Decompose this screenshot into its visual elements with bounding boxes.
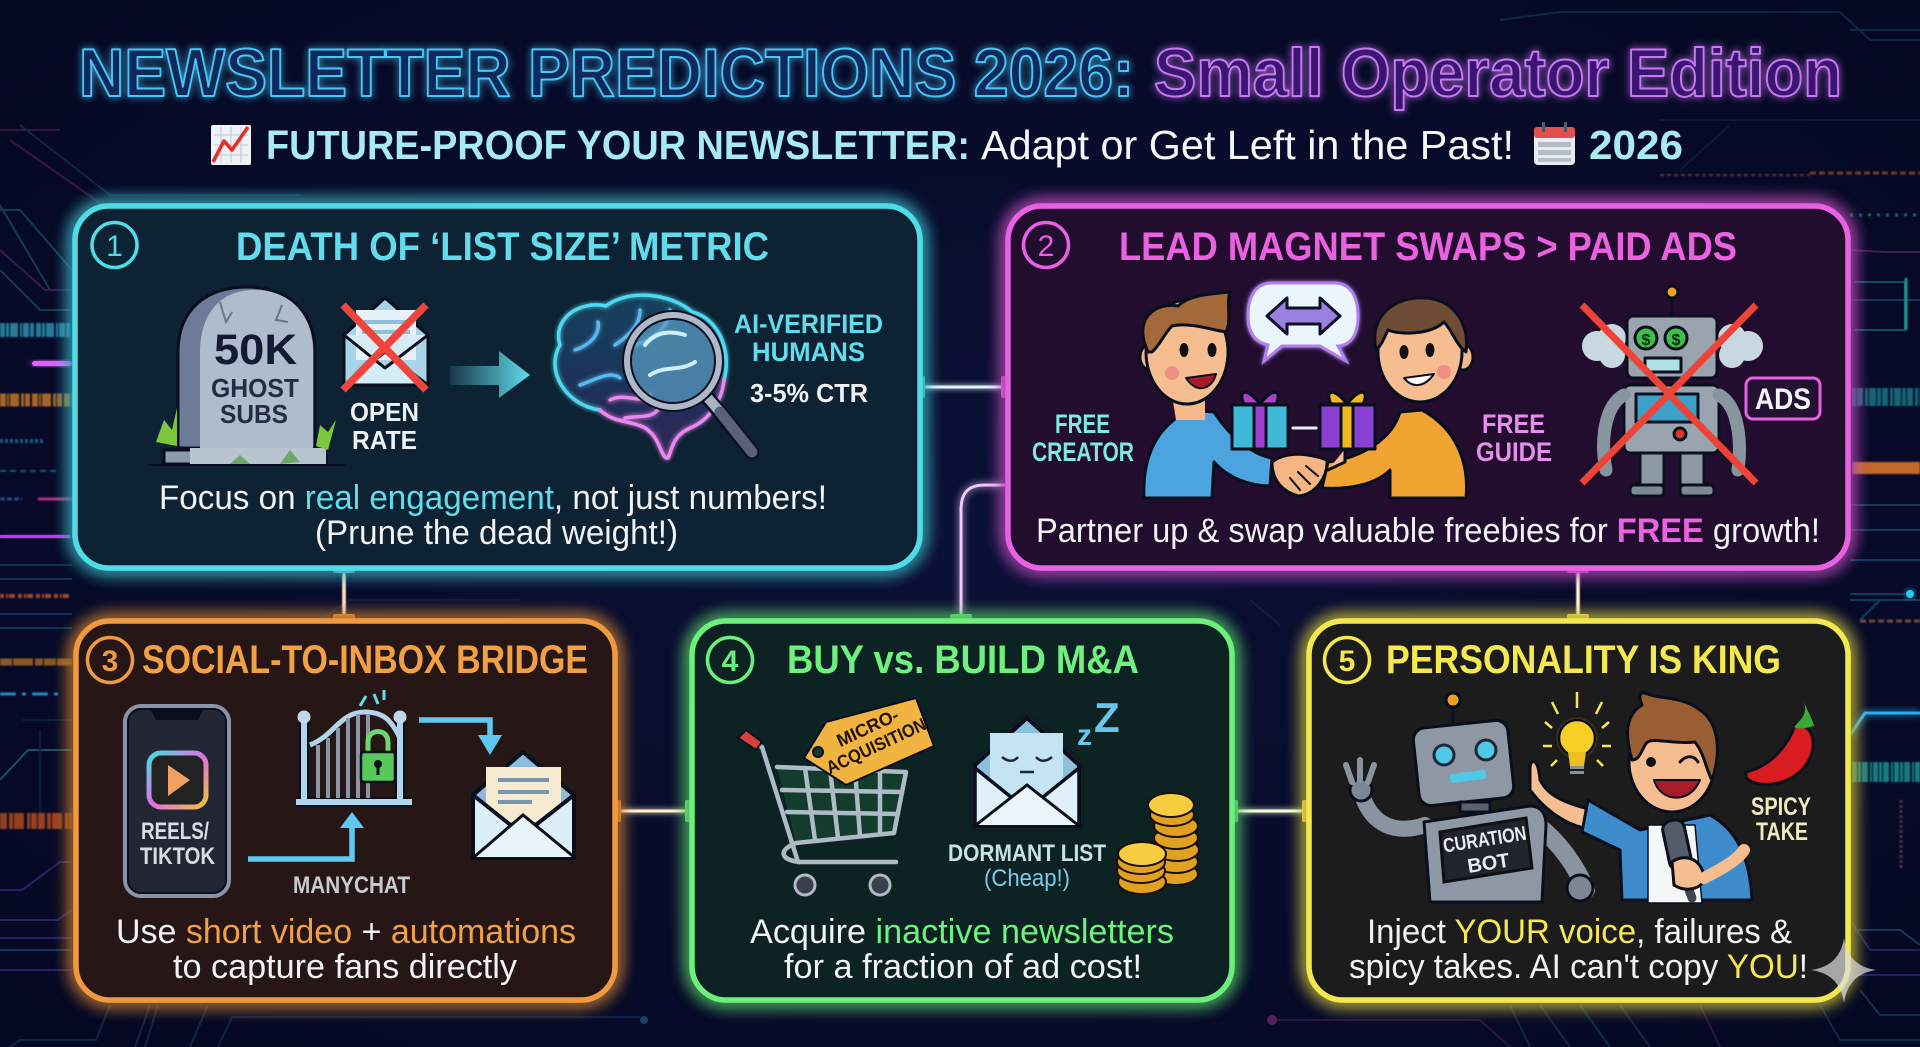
arrow head [340,812,364,828]
connector: 2 to 5 [1567,566,1589,621]
connector: 2 to 4 [950,485,1005,621]
number badge 1 [92,222,137,268]
illustration: curation bot: BOT [1466,850,1511,878]
number badge 4: 4 [722,645,739,678]
arrow: gate to envelope [419,720,502,755]
icon: gifts [1232,392,1375,470]
panel 3: social-to-inbox bridge [76,621,615,1000]
icon: tombstone 50K ghost subs: GHOST [211,373,299,403]
icon: shopping cart with tag: MICRO- [834,705,902,751]
number badge 3 [88,638,132,682]
icon: ad robot crossed out: $ [1672,332,1681,349]
illustration: presenter [1530,693,1752,903]
label: spicy take: TAKE [1756,818,1808,846]
label: AI-verified humans: AI-VERIFIED [734,309,883,339]
icon: tombstone 50K ghost subs [148,287,345,465]
panel 2: lead magnet swaps [1008,206,1848,568]
connectors between panels [333,376,1589,822]
body text: Acquire inactive newsletters [750,913,1174,951]
heading: SOCIAL-TO-INBOX BRIDGE [142,638,588,682]
label: open rate [350,397,419,455]
body text: Use short video + automations [116,913,576,951]
icon: lightbulb [1543,692,1611,774]
panel 5: personality is king [1309,621,1848,1000]
body text [159,479,827,552]
icon: open envelope [473,752,574,858]
subtitle: FUTURE-PROOF YOUR NEWSLETTER: [266,122,970,168]
icon: envelope crossed out [343,298,428,390]
body text: spicy takes. AI can't copy YOU! [1349,948,1808,986]
icon: zz: Z [1094,694,1120,741]
icon: zz [1077,694,1120,752]
heading: DEATH OF ‘LIST SIZE’ METRIC [236,225,769,269]
icon: calendar emoji [1534,122,1575,165]
arrow: phone to gate [248,826,352,859]
icon: sleeping envelope [975,718,1079,826]
subtitle [211,122,1683,168]
icon: locked gate [296,690,412,802]
label: dormant list [948,840,1106,892]
body text: Focus on real engagement, not just numbers! [159,479,827,517]
label: ADS [1746,378,1820,419]
panel 4: buy vs build [692,621,1232,1000]
icon: brain with magnifier [555,295,752,458]
icon: chart emoji [211,125,251,165]
illustration: right creator [1322,298,1473,498]
label: free creator: FREE [1055,409,1110,439]
number badge 3: 3 [102,645,118,678]
label: open rate: OPEN [350,397,419,427]
label: open rate: RATE [352,425,417,455]
body text [750,913,1174,986]
body text: for a fraction of ad cost! [784,948,1142,986]
number badge 2 [1024,222,1068,268]
body text: Partner up & swap valuable freebies for FREE growth! [1036,512,1820,550]
title [79,35,1842,111]
icon: phone with reels: REELS/ [141,818,209,845]
icon: ad robot crossed out: $ [1642,332,1651,349]
icon: phone with reels [125,706,229,896]
heading: LEAD MAGNET SWAPS > PAID ADS [1119,225,1737,269]
title: NEWSLETTER PREDICTIONS 2026: [79,35,1134,111]
title: Small Operator Edition [1154,35,1842,111]
icon: phone with reels: TIKTOK [140,843,216,870]
connector: 4 to 5 [1231,800,1309,822]
icon: sparkle watermark [1811,938,1876,1003]
label: free guide: GUIDE [1476,437,1552,467]
label: dormant list: (Cheap!) [984,865,1070,892]
body text [1349,913,1808,986]
label: CTR: 3-5% CTR [750,378,868,408]
icon: handshake [1272,454,1327,496]
label: AI-verified humans [734,309,883,367]
subtitle: 2026 [1589,122,1683,168]
label: ADS: ADS [1755,383,1811,416]
illustration: left creator [1140,292,1272,498]
label: free creator [1032,409,1134,467]
label: manychat: MANYCHAT [293,872,410,899]
illustration: curation bot: CURATION [1442,823,1528,858]
icon: gold coins [1117,793,1199,894]
body text: Inject YOUR voice, failures & [1367,913,1792,951]
left data strips [0,330,74,821]
arrow [450,351,530,398]
icon: chili pepper [1746,702,1814,784]
icon: zz: z [1077,719,1092,752]
label: dormant list: DORMANT LIST [948,840,1106,867]
number badge 5: 5 [1339,645,1355,678]
icon: shopping cart with tag [738,696,934,895]
label: free creator: CREATOR [1032,437,1134,467]
icon: tombstone 50K ghost subs: SUBS [220,399,288,429]
heading: PERSONALITY IS KING [1386,638,1781,682]
connector: 1 to 3 [333,566,355,621]
number badge 2: 2 [1038,230,1054,263]
connector: 1 to 2 [919,376,1008,398]
number badge 1: 1 [106,230,123,263]
body text: to capture fans directly [173,948,517,986]
number badge 4 [708,638,752,682]
number badge 5 [1324,638,1370,682]
label: spicy take [1751,793,1811,846]
body text: (Prune the dead weight!) [315,514,678,552]
label: AI-verified humans: HUMANS [752,337,865,367]
connector: 3 to 4 [614,800,692,822]
label: free guide: FREE [1482,409,1545,439]
icon: ad robot crossed out [1582,286,1763,496]
subtitle: Adapt or Get Left in the Past! [981,122,1514,168]
body text [116,913,576,986]
heading: BUY vs. BUILD M&A [787,638,1139,682]
icon: speech bubble with swap arrow [1248,283,1358,361]
icon: shopping cart with tag: ACQUISITION [823,714,929,778]
right data strips [1660,173,1920,870]
label: spicy take: SPICY [1751,793,1811,821]
icon: tombstone 50K ghost subs: 50K [214,326,297,374]
label: free guide [1476,409,1552,467]
panel 1: death of list size metric [75,206,920,568]
illustration: curation bot [1346,693,1593,902]
